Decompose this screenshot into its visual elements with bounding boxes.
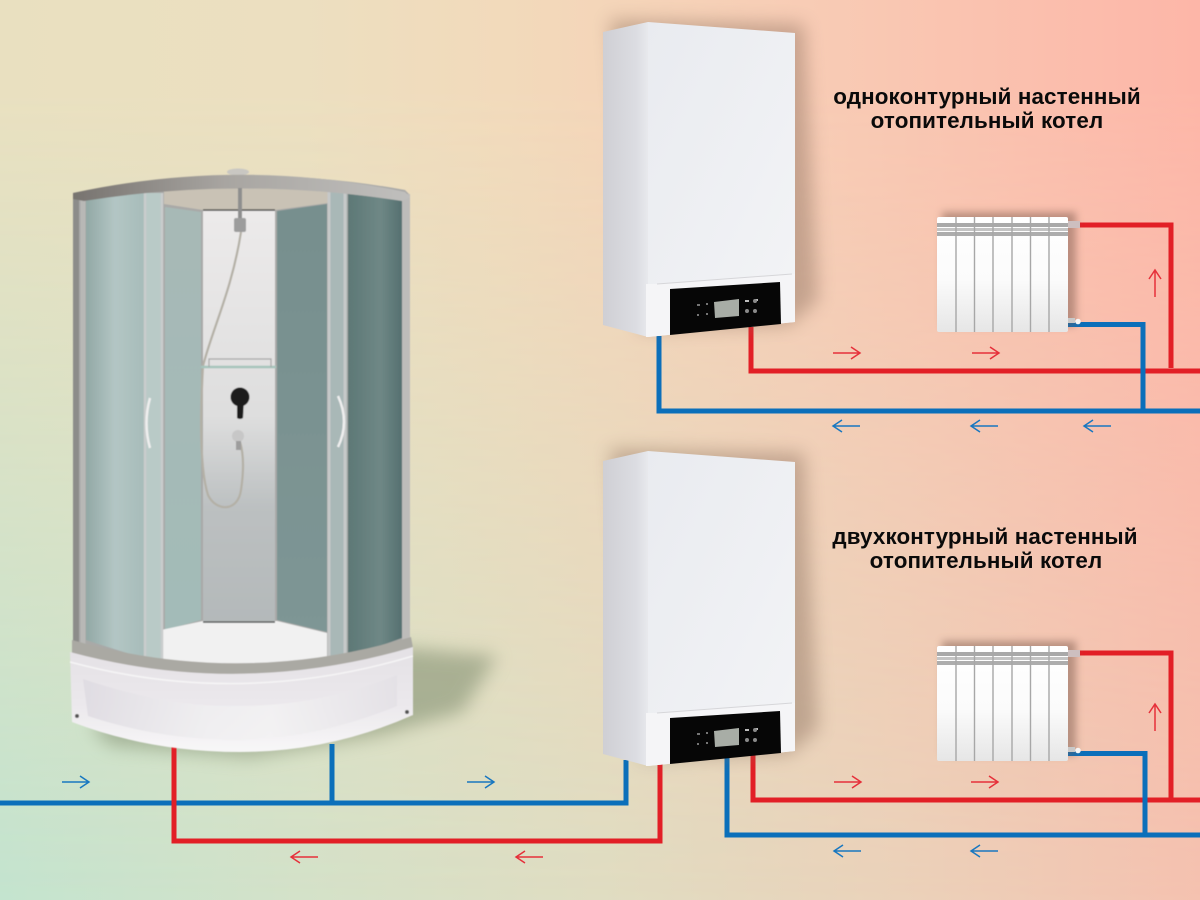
hose connector: [232, 430, 244, 450]
cold water branch to the shower: [330, 744, 334, 803]
central column: [203, 211, 275, 622]
arrow: top red right 2: [972, 347, 999, 359]
hot water pipe from the boiler to the shower: [174, 744, 660, 841]
tub screws: [75, 710, 409, 718]
heating pipes: bottom circuit, radiator blue drop: [1068, 754, 1145, 835]
cabin frame back: [73, 176, 410, 666]
tub base apron: [70, 647, 413, 752]
arrow: top blue left 3: [1084, 420, 1111, 432]
shower floor shadow: [90, 648, 497, 757]
heating pipes: bottom circuit, radiator red riser: [1080, 653, 1171, 798]
heading: single-circuit boiler: отопительный котел: [871, 108, 1103, 133]
arrow: bottom red up: [1149, 704, 1161, 731]
ceiling: [164, 188, 328, 210]
arrow: top red right 1: [833, 347, 860, 359]
glass shelf: [201, 359, 276, 367]
radiator 1 shadow: [942, 212, 1076, 326]
shower head top knob: [227, 168, 249, 176]
left door handle: [146, 398, 150, 448]
column top shadow line: [203, 209, 275, 211]
heating pipes: bottom circuit, blue return: [727, 758, 1200, 835]
arrow: bottom blue left 2: [971, 845, 998, 857]
heading: double-circuit boiler: двухконтурный настенный: [832, 524, 1138, 549]
right door handle: [338, 396, 344, 447]
inner left glass: [165, 207, 201, 630]
arrow: bottom red right 1: [834, 776, 861, 788]
right door strip: [328, 192, 347, 662]
heating pipes: top circuit, red supply: [751, 327, 1200, 371]
heating pipes: top circuit, radiator blue drop: [1068, 324, 1143, 411]
cold water pipe from the left to the boiler: [0, 760, 626, 803]
radiator 1: [937, 217, 1081, 332]
heating pipes: top circuit, blue return: [659, 336, 1200, 411]
heating pipes: bottom circuit, red supply: [753, 755, 1200, 800]
shower rail and holder: [238, 188, 242, 225]
boiler 2: double-circuit wall unit: [603, 451, 795, 766]
left door strip: [146, 193, 162, 661]
left door glass: [86, 193, 144, 658]
arrow: bottom red right 2: [971, 776, 998, 788]
tub interior: [161, 621, 327, 668]
heading: single-circuit boiler: одноконтурный настенный: [833, 84, 1141, 109]
boiler 1 shadow: [610, 20, 818, 330]
arrow: top blue left 1: [833, 420, 860, 432]
arrow: cold water right 2: [467, 776, 494, 788]
shower hose: [201, 232, 243, 507]
heating pipes: top circuit, radiator red riser: [1080, 225, 1171, 368]
boiler 2 shadow: [610, 449, 818, 759]
right door glass: [348, 194, 402, 656]
frame side posts: [73, 195, 79, 644]
inner right glass: [277, 204, 327, 632]
arrow: hot water left 2: [516, 851, 543, 863]
mixer tap: [230, 388, 250, 419]
arrow: top blue left 2: [971, 420, 998, 432]
lower aluminium frame: [72, 637, 413, 675]
arrow: hot water left 1: [291, 851, 318, 863]
radiator 2: [937, 646, 1081, 761]
apron trim lines: [70, 656, 413, 684]
arrow: bottom blue left 1: [834, 845, 861, 857]
shower cabin: [70, 168, 413, 752]
radiator 2 shadow: [942, 641, 1076, 755]
arrow: cold water right 1: [62, 776, 89, 788]
tub apron recess: [83, 675, 397, 740]
boiler 1: single-circuit wall unit: [603, 22, 795, 337]
top arched frame: [73, 175, 410, 201]
heading: double-circuit boiler: отопительный котел: [870, 548, 1102, 573]
arrow: top red up: [1149, 270, 1161, 297]
